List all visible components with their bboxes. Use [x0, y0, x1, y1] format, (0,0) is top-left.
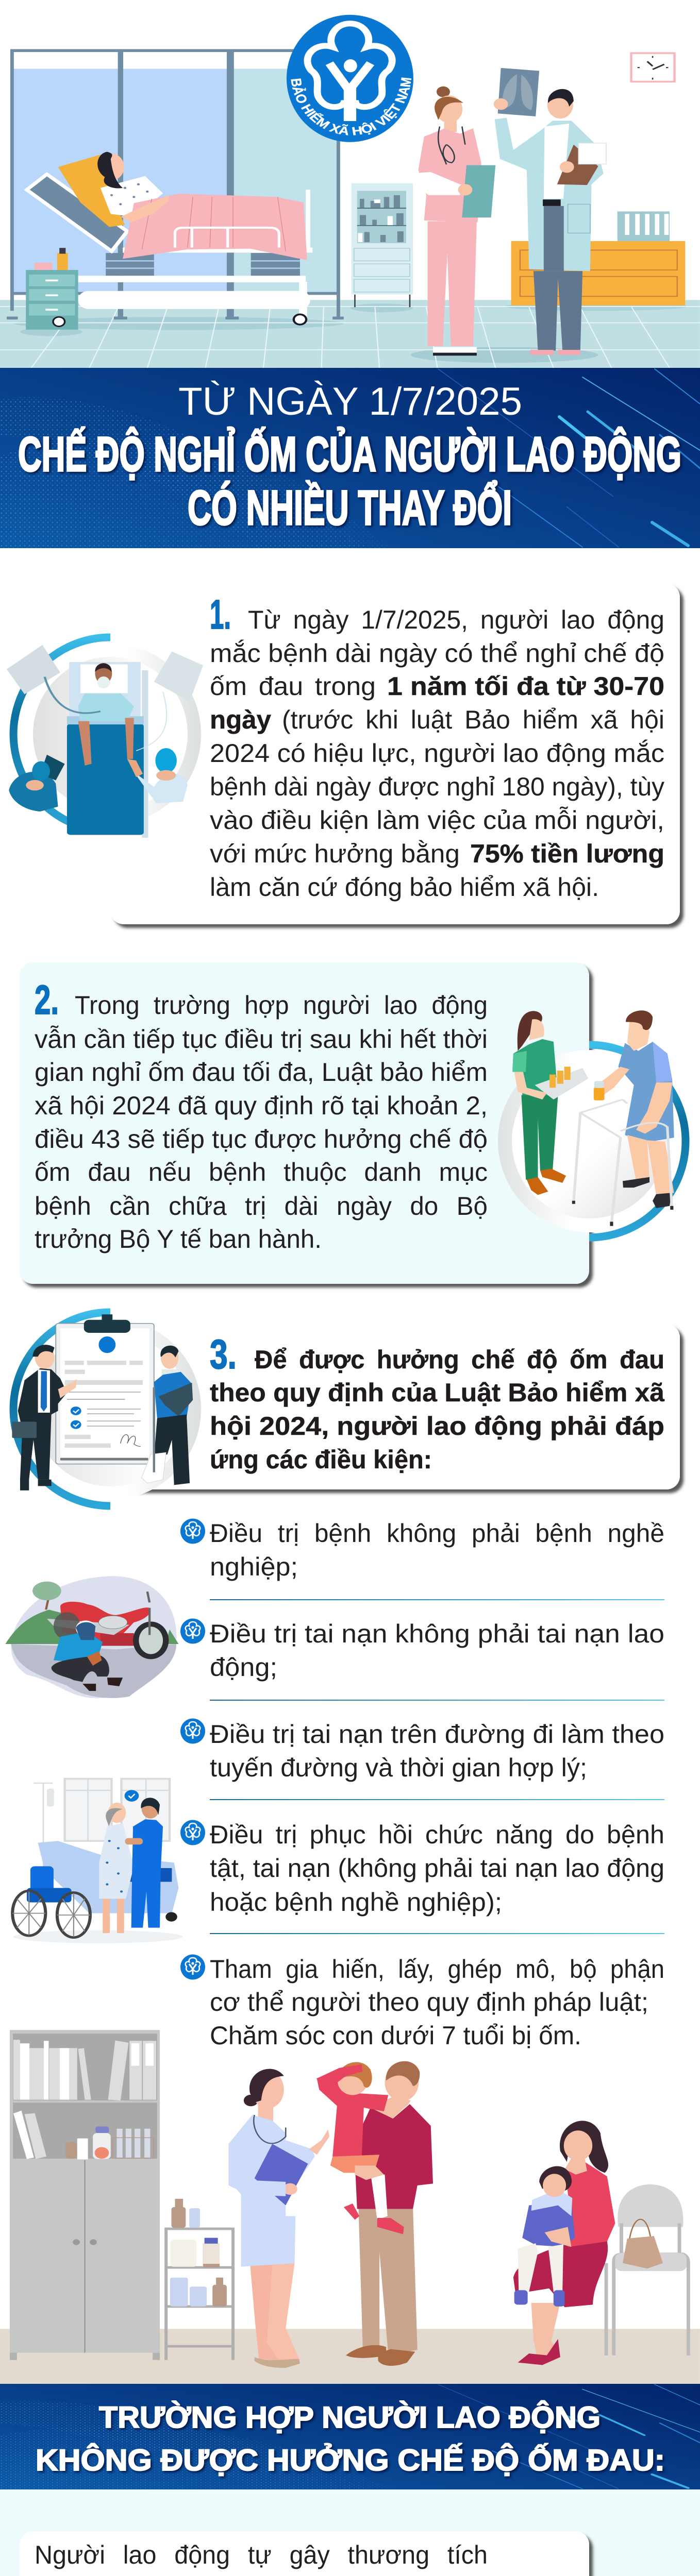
wall clock: [631, 53, 675, 82]
numeral 1: 1.: [210, 591, 231, 637]
text block 2: Trong trường hợp người lao động: [75, 991, 488, 1020]
text block 3: ứng các điều kiện:: [210, 1445, 432, 1474]
condition 5: [180, 1955, 664, 2050]
condition 4: [180, 1820, 664, 1934]
text block 1: [210, 605, 664, 902]
nurse: [418, 87, 495, 355]
condition 1: [180, 1519, 664, 1600]
illustration: clipboard, officer and injured worker: [12, 1312, 201, 1506]
condition 2: động;: [210, 1653, 277, 1682]
title banner: [0, 368, 700, 548]
illustration: nurse and patient with walker: [498, 1010, 686, 1238]
text block 1: (trước khi luật Bảo hiểm xã hội: [282, 705, 664, 734]
title line 1: TỪ NGÀY 1/7/2025: [178, 380, 522, 423]
text block 2: điều 43 sẽ tiếp tục được hưởng chế độ: [35, 1125, 488, 1154]
condition 5: cơ thể người theo quy định pháp luật;: [210, 1988, 648, 2016]
text block 3: hội 2024, người lao động phải đáp: [210, 1412, 664, 1440]
bedside table: [26, 248, 78, 330]
father carrying daughter: [316, 2061, 433, 2366]
panel 2: continued treatment: [20, 962, 686, 1284]
text block 2: [35, 991, 488, 1253]
text block 2: xã hội 2024 đã quy định rõ tại khoản 2,: [35, 1091, 488, 1120]
lower section background: [0, 2489, 700, 2576]
text block 1: vào điều kiện làm việc của mỗi người,: [210, 806, 664, 835]
text block 4: Người lao động tự gây thương tích: [35, 2540, 488, 2569]
condition list: [180, 1519, 664, 2050]
text block 2: bệnh cần chữa trị dài ngày do Bộ: [35, 1192, 488, 1221]
text block 3: Để được hưởng chế độ ốm đau: [255, 1345, 664, 1374]
condition 3: Điều trị tai nạn trên đường đi làm theo: [210, 1720, 664, 1749]
condition 3: [180, 1719, 664, 1800]
title line 3: CÓ NHIỀU THAY ĐỔI: [188, 481, 512, 535]
desk with binders: [511, 211, 685, 306]
mother and child on chair: [513, 2121, 688, 2365]
card 1 background: [110, 584, 680, 924]
illustration: ventilated patient: [7, 637, 203, 838]
exclusions banner: [0, 2384, 700, 2489]
header illustration: hospital room: [0, 14, 700, 368]
illustration: road accident: [5, 1576, 178, 1698]
illustration: rehabilitation with nurse and wheelchair: [12, 1779, 183, 1943]
medicine cabinet: [352, 183, 413, 307]
condition 2: Điều trị tai nạn không phải tai nạn lao: [210, 1619, 664, 1648]
numeral 3: 3.: [210, 1331, 237, 1377]
floor: [0, 300, 700, 369]
clinic floor: [0, 2329, 700, 2385]
illustration: clinic scene with sick children: [0, 2030, 700, 2385]
text block 1: 75% tiền lương: [470, 839, 664, 868]
panel 3: eligibility conditions: [12, 1312, 680, 1506]
panel 1: sick leave duration: [7, 584, 680, 924]
text block 2: gian nghỉ ốm đau tối đa, Luật bảo hiểm: [35, 1058, 488, 1087]
condition 3: tuyến đường và thời gian hợp lý;: [210, 1753, 587, 1782]
banner line 1: TRƯỜNG HỢP NGƯỜI LAO ĐỘNG: [99, 2401, 601, 2434]
banner line 2: KHÔNG ĐƯỢC HƯỞNG CHẾ ĐỘ ỐM ĐAU:: [36, 2444, 665, 2477]
text block 2: ốm đau nếu bệnh thuộc danh mục: [35, 1158, 488, 1187]
panel 4: self-harm and drugs exclusion: [20, 2531, 686, 2576]
text block 1: ốm đau trong: [210, 672, 376, 701]
text block 1: với mức hưởng bằng: [210, 839, 460, 868]
condition 1: nghiệp;: [210, 1552, 298, 1581]
logo: Bảo hiểm xã hội Việt Nam: [287, 14, 413, 142]
folding curtain screen: [7, 50, 344, 318]
condition 4: hoặc bệnh nghề nghiệp);: [210, 1888, 502, 1917]
text block 1: ngày: [210, 705, 271, 734]
doctor: [228, 2069, 329, 2368]
text block 1: bệnh dài ngày được nghỉ 180 ngày), tùy: [210, 772, 664, 801]
card 2 background: [20, 962, 589, 1284]
condition 2: [180, 1619, 664, 1701]
card 4 background: [20, 2531, 589, 2576]
text block 3: theo quy định của Luật Bảo hiểm xã: [210, 1378, 664, 1407]
hospital bed with patient: [27, 152, 312, 325]
logo: Bảo hiểm xã hội Việt Nam: BẢO HIỂM XÃ HỘI VIỆT NAM: [291, 77, 411, 135]
numeral 2: 2.: [35, 977, 59, 1023]
condition 4: tật, tai nạn (không phải tai nạn lao động: [210, 1854, 664, 1883]
text block 2: trưởng Bộ Y tế ban hành.: [35, 1225, 322, 1253]
card 3 background: [110, 1324, 680, 1489]
condition 1: Điều trị bệnh không phải bệnh nghề: [210, 1519, 664, 1548]
medicine cart: [166, 2199, 233, 2360]
condition 5: Tham gia hiến, lấy, ghép mô, bộ phận: [210, 1955, 664, 1984]
text block 3: [210, 1345, 664, 1474]
text block 1: mắc bệnh dài ngày có thể nghỉ chế độ: [210, 639, 664, 668]
text block 2: vẫn cần tiếp tục điều trị sau khi hết thời: [35, 1025, 488, 1054]
condition 5: Chăm sóc con dưới 7 tuổi bị ốm.: [210, 2021, 581, 2050]
text block 1: 1 năm tối đa từ 30-70: [387, 672, 664, 701]
text block 1: 2024 có hiệu lực, người lao động mắc: [210, 739, 664, 768]
text block 1: làm căn cứ đóng bảo hiểm xã hội.: [210, 873, 599, 902]
text block 1: Từ ngày 1/7/2025, người lao động: [248, 605, 664, 634]
storage cabinet: [10, 2030, 160, 2360]
doctor with x-ray: [494, 68, 606, 355]
condition 4: Điều trị phục hồi chức năng do bệnh: [210, 1820, 664, 1849]
